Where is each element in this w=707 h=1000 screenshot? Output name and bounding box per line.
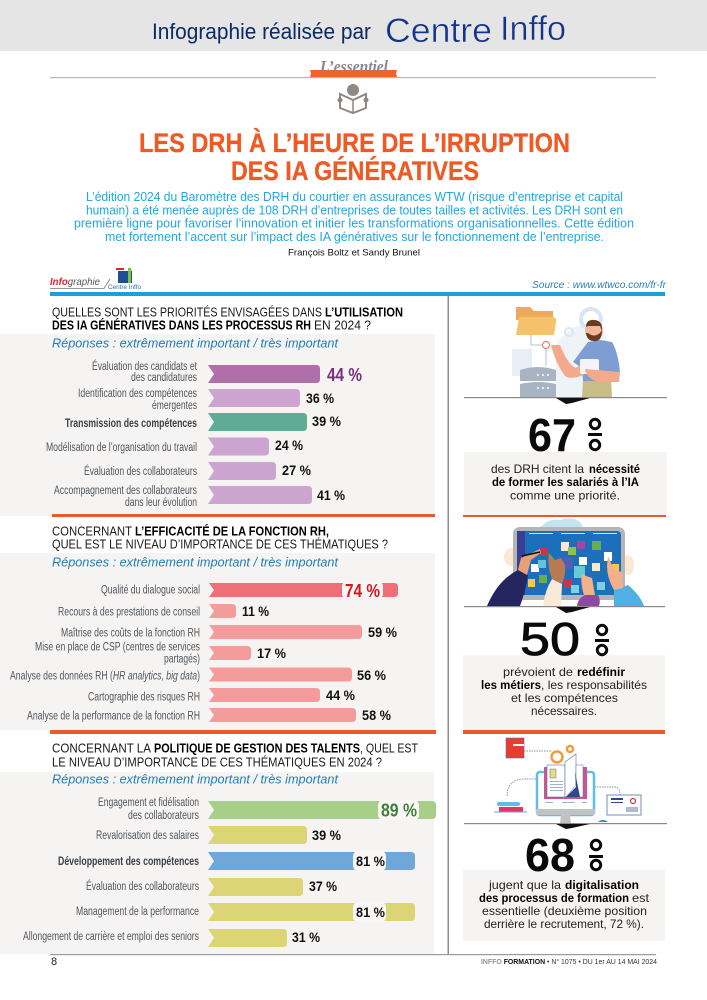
- heading: LE NIVEAU D’IMPORTANCE DE CES THÉMATIQUES EN 2024 ?: [52, 754, 382, 770]
- heading: [52, 304, 403, 332]
- callout 1: comme une priorité.: [510, 488, 620, 502]
- bar chart 2: partagés): [164, 654, 200, 666]
- heading: CONCERNANT LA: [52, 740, 151, 756]
- bar chart 3: 31 %: [292, 929, 320, 945]
- heading: , QUEL EST: [360, 740, 418, 756]
- bar chart 3: [23, 797, 436, 947]
- authors: François Boltz et Sandy Brunel: [288, 248, 420, 258]
- heading: L’EFFICACITÉ DE LA FONCTION RH,: [135, 524, 329, 538]
- callout 2: et les compétences: [511, 691, 618, 705]
- panel: utilisation des IA: [0, 304, 435, 517]
- callout 3: essentielle (deuxième position: [482, 904, 647, 918]
- callout 1: des DRH citent la: [491, 462, 584, 476]
- icon: person reading a book: [338, 84, 368, 113]
- bar chart 1: Évaluation des candidats et: [92, 360, 198, 373]
- intro paragraph: [74, 190, 634, 244]
- stat: 68 %: [525, 829, 603, 881]
- bar chart 2: 74 %: [345, 581, 380, 601]
- footer: 8: [51, 956, 57, 968]
- bar chart 2: 11 %: [242, 603, 269, 619]
- bar chart 1: Évaluation des collaborateurs: [84, 465, 197, 478]
- intro paragraph: met fortement l’accent sur l’impact des IA génératives sur le fonctionnement de l’entreprise.: [105, 230, 604, 244]
- bar chart 2: 59 %: [368, 624, 397, 640]
- bar chart 1: 27 %: [282, 462, 311, 478]
- callout 2: nécessaires.: [531, 704, 597, 718]
- subheading: Réponses : extrêmement important / très important: [52, 336, 339, 350]
- bar chart 2: Mise en place de CSP (centres de services: [35, 642, 200, 654]
- title: [139, 127, 570, 186]
- top banner: Centre: [385, 12, 492, 50]
- bar chart 2: Analyse des données RH (HR analytics, big data): [10, 670, 200, 682]
- bar chart 1: des candidatures: [131, 372, 197, 384]
- illustration: hands on tablet with sticky notes: [487, 518, 644, 606]
- bar chart 2: Qualité du dialogue social: [101, 584, 200, 596]
- footer: INFFO FORMATION • N° 1075 • DU 1er AU 14 MAI 2024: [481, 957, 657, 966]
- bar chart 3: 81 %: [356, 853, 385, 869]
- top banner: [0, 0, 707, 51]
- callout 1: de former les salariés à l’IA: [492, 475, 639, 489]
- stat: 50 %: 50: [520, 613, 580, 665]
- bar chart 2: Analyse de la performance de la fonction RH: [27, 710, 200, 722]
- bar chart 1: dans leur évolution: [125, 497, 197, 509]
- callout 2: redéfinir: [577, 665, 625, 679]
- bar chart 1: 44 %: [327, 365, 362, 385]
- bar chart 1: [46, 360, 362, 509]
- infographie logo: [50, 268, 141, 291]
- bar chart 3: Revalorisation des salaires: [96, 830, 199, 842]
- bar chart 3: 39 %: [312, 827, 341, 843]
- callout 3: est: [632, 891, 650, 905]
- callout 2: , les responsabilités: [541, 678, 647, 692]
- bar chart 2: 58 %: [362, 707, 391, 723]
- heading: [52, 524, 388, 552]
- blue rule: [50, 292, 665, 296]
- illustration: monitor with open book: [494, 738, 641, 823]
- callout 3: [463, 870, 665, 941]
- callout 2: les métiers: [481, 678, 541, 692]
- bar chart 1: émergentes: [152, 400, 197, 412]
- heading: EN 2024 ?: [314, 318, 371, 332]
- bar chart 2: 44 %: [326, 687, 355, 703]
- section tag: L'essentiel: [50, 57, 656, 78]
- heading: CONCERNANT: [52, 524, 132, 538]
- bar chart 3: Management de la performance: [76, 906, 199, 918]
- bar chart 2: 17 %: [257, 645, 286, 661]
- divider with notch 3: [464, 823, 667, 829]
- bar chart 1: Identification des compétences: [78, 388, 197, 400]
- heading: POLITIQUE DE GESTION DES TALENTS: [154, 740, 360, 756]
- infographie logo: Infographie: [50, 276, 100, 288]
- intro paragraph: première ligne pour favoriser l’innovation et initier les transformations organisationnelles. Cette édition: [74, 216, 634, 230]
- bar chart 2: Cartographie des risques RH: [88, 692, 200, 704]
- callout 2: [463, 655, 665, 734]
- callout 1: nécessité: [589, 462, 640, 476]
- callout 1: [463, 452, 667, 517]
- callout 3: digitalisation: [565, 878, 639, 892]
- bar chart 3: Évaluation des collaborateurs: [86, 880, 199, 893]
- stat: 50 %: [520, 613, 609, 665]
- callout 3: des processus de formation: [479, 891, 629, 905]
- bar chart 2: Recours à des prestations de conseil: [58, 606, 200, 618]
- bar chart 3: 89 %: [381, 800, 417, 820]
- heading: QUELLES SONT LES PRIORITÉS ENVISAGÉES DANS: [52, 304, 322, 320]
- bar chart 1: Transmission des compétences: [65, 418, 197, 430]
- stat: 67 %: [528, 409, 602, 461]
- bar chart 3: des collaborateurs: [128, 810, 199, 822]
- panel: politique de gestion des talents: [0, 740, 436, 954]
- stat: 68 %: 68: [525, 829, 575, 881]
- intro paragraph: L’édition 2024 du Baromètre des DRH du courtier en assurances WTW (risque d’entreprise et capital: [86, 190, 623, 204]
- divider with notch 2: [464, 606, 665, 613]
- section tag: L'essentiel: L’essentiel: [319, 57, 388, 76]
- heading: [52, 740, 418, 770]
- bar chart 3: 37 %: [309, 878, 337, 894]
- bar chart 3: Allongement de carrière et emploi des seniors: [23, 931, 199, 943]
- bar chart 2: [10, 581, 398, 723]
- callout 3: jugent que la: [488, 878, 561, 892]
- title: DES IA GÉNÉRATIVES: [231, 155, 479, 186]
- callout 2: prévoient de: [503, 665, 573, 679]
- bar chart 1: 24 %: [275, 437, 303, 453]
- bar chart 3: Développement des compétences: [58, 856, 199, 868]
- heading: DES IA GÉNÉRATIVES DANS LES PROCESSUS RH: [52, 318, 311, 332]
- bar chart 1: 41 %: [317, 487, 345, 503]
- bar chart 3: 81 %: [356, 904, 385, 920]
- bar chart 2: 56 %: [357, 667, 386, 683]
- divider with notch 1: [464, 397, 667, 404]
- bar chart 1: 36 %: [306, 390, 334, 406]
- stat: 67 %: 67: [528, 409, 576, 461]
- infographie logo: Centre Inffo: [108, 284, 141, 291]
- bar chart 1: Accompagnement des collaborateurs: [54, 485, 197, 497]
- callout 3: derrière le recrutement, 72 %).: [484, 917, 644, 931]
- subheading: Réponses : extrêmement important / très important: [52, 554, 339, 570]
- panel: efficacité de la fonction RH: [0, 524, 436, 734]
- illustration: man with folder and servers: [512, 307, 620, 397]
- source: Source : www.wtwco.com/fr-fr: [532, 280, 667, 291]
- subheading: Réponses : extrêmement important / très important: [52, 772, 339, 786]
- heading: QUEL EST LE NIVEAU D’IMPORTANCE DE CES THÉMATIQUES ?: [52, 536, 388, 552]
- top banner: Inffo: [500, 10, 566, 48]
- bar chart 3: Engagement et fidélisation: [98, 797, 199, 809]
- footer: [50, 954, 657, 968]
- top banner: Infographie réalisée par: [152, 19, 371, 44]
- title: LES DRH À L’HEURE DE L’IRRUPTION: [139, 127, 570, 158]
- heading: L’UTILISATION: [325, 304, 403, 320]
- bar chart 2: Maîtrise des coûts de la fonction RH: [61, 628, 200, 640]
- intro paragraph: humain) a été menée auprès de 108 DRH d’entreprises de toutes tailles et activités. Les DRH sont en: [86, 204, 623, 218]
- bar chart 1: 39 %: [312, 413, 341, 429]
- bar chart 1: Modélisation de l’organisation du travail: [46, 442, 197, 454]
